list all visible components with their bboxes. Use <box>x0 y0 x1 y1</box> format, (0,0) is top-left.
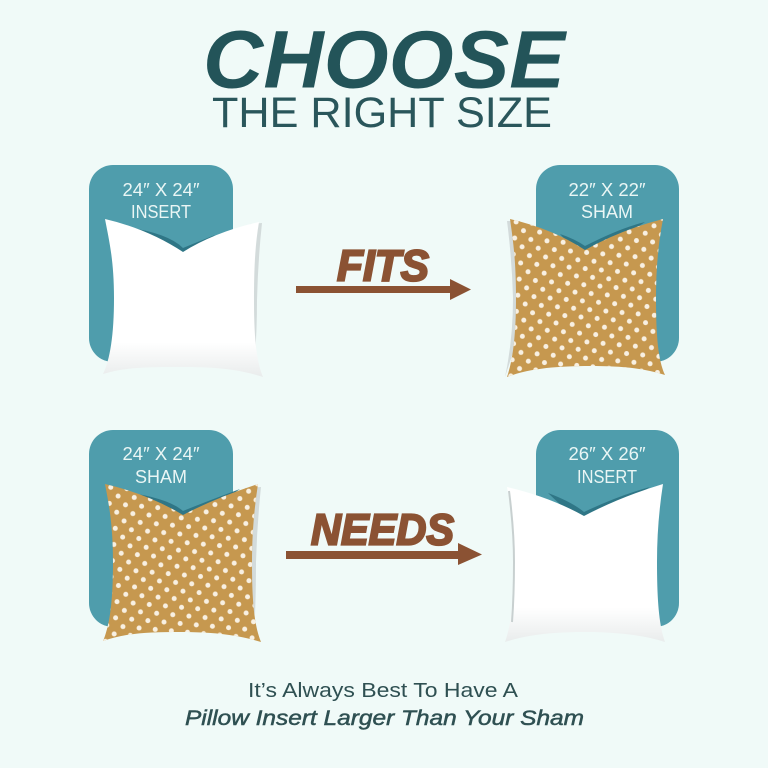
panel: 26 x 26 insert needs: INSERT <box>577 467 637 487</box>
panel: 22 x 22 sham fits: 22″ X 22″ <box>568 180 646 200</box>
label: needs: NEEDS <box>311 506 454 554</box>
panel: 24 x 24 insert fits: INSERT <box>131 202 191 222</box>
arrow: fits <box>296 279 471 300</box>
pillow: polka dot sham <box>103 484 261 642</box>
panel: 22 x 22 sham fits: SHAM <box>581 202 633 222</box>
pillow: white insert <box>103 219 263 377</box>
panel: 24 x 24 sham needs: SHAM <box>135 467 187 487</box>
footer text: It’s Always Best To Have A <box>248 680 519 702</box>
title: CHOOSE <box>203 14 567 106</box>
panel: 24 x 24 sham needs <box>89 430 261 642</box>
pillow: white insert <box>505 484 665 642</box>
pillow: polka dot sham <box>507 219 665 377</box>
panel: 24 x 24 insert fits: 24″ X 24″ <box>122 180 200 200</box>
arrow: needs <box>286 543 482 565</box>
label: fits: FITS <box>337 242 429 290</box>
footer text <box>185 680 584 730</box>
panel: 24 x 24 insert fits <box>89 165 263 377</box>
panel: 22 x 22 sham fits <box>505 165 679 377</box>
panel: 26 x 26 insert needs: 26″ X 26″ <box>568 444 646 464</box>
panel: 24 x 24 sham needs: 24″ X 24″ <box>122 444 200 464</box>
title: THE RIGHT SIZE <box>212 89 552 137</box>
footer text: Pillow Insert Larger Than Your Sham <box>185 707 584 730</box>
panel: 26 x 26 insert needs <box>505 430 679 642</box>
